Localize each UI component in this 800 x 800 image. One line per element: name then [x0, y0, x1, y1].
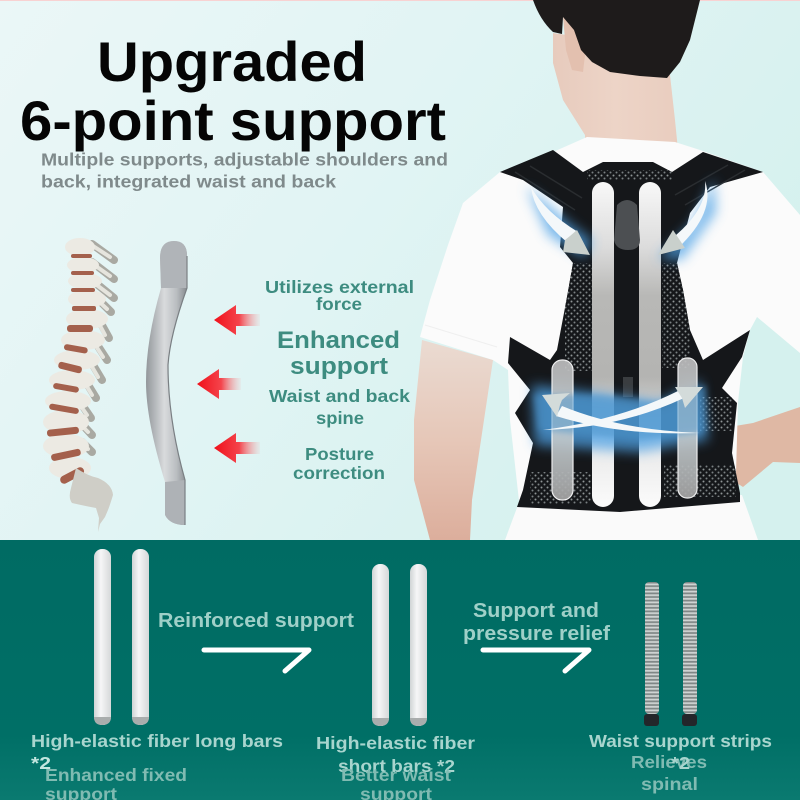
- caption: spring strips: Waist support strips: [589, 731, 772, 751]
- waist arrow to left: [542, 393, 700, 433]
- waist support bars: [552, 360, 573, 500]
- hair: [533, 0, 700, 78]
- caption: spring strips: *2: [671, 753, 690, 773]
- caption: long bars: [31, 731, 283, 800]
- support and pressure relief label: pressure relief: [463, 623, 610, 645]
- mesh panels: [530, 170, 736, 504]
- title: [20, 30, 446, 152]
- caption: long bars: Enhanced fixed: [45, 765, 187, 785]
- waist and back spine: Waist and back: [269, 386, 410, 406]
- fiber long bars: [94, 549, 149, 725]
- white t-shirt: [420, 137, 800, 510]
- title: 6-point support: [20, 89, 446, 152]
- caption: spring strips: [589, 731, 772, 794]
- enhanced support: Enhanced: [277, 327, 400, 354]
- red arrow middle: [197, 369, 241, 399]
- fiber short bars: [372, 564, 427, 726]
- caption: spring strips: spinal: [641, 774, 698, 794]
- caption: long bars: High-elastic fiber long bars: [31, 731, 283, 751]
- enhanced support: support: [290, 353, 388, 380]
- left arm: [414, 340, 493, 540]
- posture correction: Posture: [305, 444, 374, 464]
- long support bars: [592, 182, 614, 507]
- support and pressure relief label: Support and: [473, 600, 599, 622]
- black brace: [500, 150, 763, 512]
- caption: short bars: High-elastic fiber: [316, 733, 475, 753]
- utilizes external force: [265, 277, 414, 314]
- right forearm and hand: [732, 407, 800, 487]
- discs: [47, 254, 96, 485]
- centre tag: [623, 377, 633, 397]
- utilizes external force: Utilizes external: [265, 277, 414, 297]
- sleeve hem stitch: [425, 325, 497, 347]
- blue band over waist: [534, 385, 706, 440]
- waist support spring strips: [644, 582, 697, 726]
- illustration: spine: [43, 238, 114, 532]
- red arrow bottom: [214, 433, 260, 463]
- support and pressure relief label: [463, 600, 610, 645]
- reinforced support label: Reinforced support: [158, 610, 354, 632]
- sacrum and tail: [70, 468, 113, 532]
- shoulder strap sheen: [515, 165, 745, 210]
- support callouts: [265, 277, 414, 483]
- person photo wearing posture brace: [414, 0, 800, 540]
- red arrow top: [214, 305, 260, 335]
- bar dark edge: [168, 256, 187, 525]
- subtitle: Multiple supports, adjustable shoulders and: [41, 150, 448, 170]
- ear: [563, 17, 585, 72]
- waist and back spine: spine: [316, 408, 364, 428]
- bar top cap: [160, 241, 187, 288]
- caption: short bars: short bars *2: [338, 756, 455, 776]
- subtitle: back, integrated waist and back: [41, 172, 336, 192]
- shoulder arrow left: [531, 187, 590, 255]
- waist and back spine: [269, 386, 410, 428]
- adjustment buckle: [614, 200, 640, 250]
- title: Upgraded: [97, 30, 367, 93]
- bar bottom cap: [165, 480, 185, 525]
- caption: spring strips: Relieves: [631, 752, 707, 772]
- vertebral bodies: [43, 238, 108, 479]
- shoulder arrow right: [658, 181, 707, 255]
- utilizes external force: force: [316, 294, 362, 314]
- waist arrow to right: [543, 387, 703, 430]
- caption: short bars: [316, 733, 475, 800]
- posture correction: correction: [293, 463, 385, 483]
- arrow to spring strips: [483, 650, 589, 671]
- caption: long bars: *2: [31, 753, 51, 773]
- caption: short bars: Better waist: [341, 765, 451, 785]
- posture correction: [293, 444, 385, 483]
- subtitle: [41, 150, 448, 192]
- process highlights: [78, 244, 110, 449]
- blue glows: [526, 178, 716, 452]
- bottom teal panel: [0, 540, 800, 800]
- light background: [0, 0, 800, 540]
- enhanced support: [277, 327, 400, 380]
- arrow to short bars: [204, 650, 309, 671]
- shirt hem: [505, 495, 758, 540]
- neck and head skin: [553, 33, 678, 150]
- spinous processes: [80, 244, 114, 452]
- illustration: curved metal bar: [146, 241, 187, 525]
